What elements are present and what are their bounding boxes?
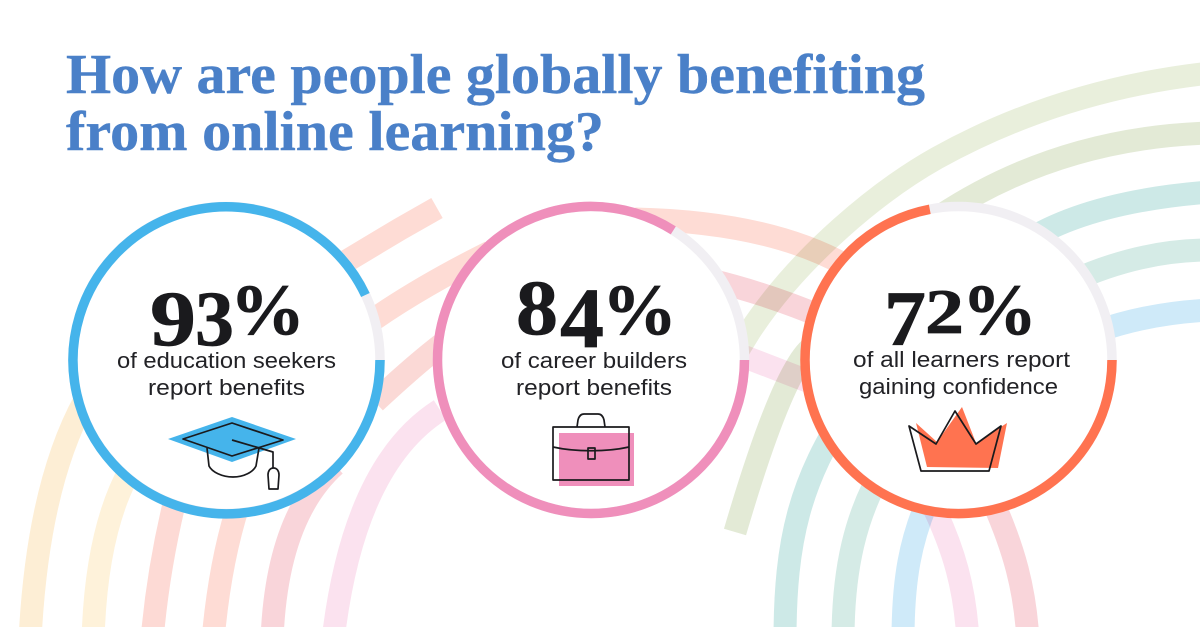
- icon: graduation cap: [168, 417, 296, 489]
- text: all learners: of all learners report: [853, 347, 1071, 372]
- panel: education seekers: [73, 206, 380, 514]
- ring: 84% progress: [437, 206, 744, 514]
- stat: 84%: 4: [560, 270, 604, 366]
- icon: briefcase: [553, 414, 634, 486]
- stat: 93%: 3: [195, 275, 234, 362]
- text: all learners: [853, 347, 1071, 399]
- stat: 93%: 9: [150, 275, 196, 362]
- title: How are people globally benefiting: [66, 44, 925, 106]
- text: education seekers: [117, 348, 336, 400]
- stat: 72%: 7: [884, 275, 926, 362]
- title: [66, 44, 925, 163]
- stat: 84%: %: [602, 270, 677, 350]
- text: career builders: report benefits: [516, 375, 672, 400]
- panel: career builders: [437, 206, 744, 514]
- title: from online learning?: [66, 101, 604, 163]
- icon: crown: [909, 407, 1007, 471]
- text: education seekers: of education seekers: [117, 348, 336, 373]
- panel: all learners: [805, 206, 1112, 514]
- stat: 72%: 2: [925, 277, 964, 347]
- text: career builders: [501, 348, 687, 400]
- text: all learners: gaining confidence: [859, 374, 1058, 399]
- ring: 72% progress: [805, 206, 1112, 514]
- stat: 84%: 8: [516, 264, 558, 351]
- ring: 93% progress: [73, 206, 380, 514]
- stat: 93%: %: [230, 270, 305, 350]
- stat: 72%: %: [962, 270, 1037, 350]
- text: career builders: of career builders: [501, 348, 687, 373]
- text: education seekers: report benefits: [148, 375, 305, 400]
